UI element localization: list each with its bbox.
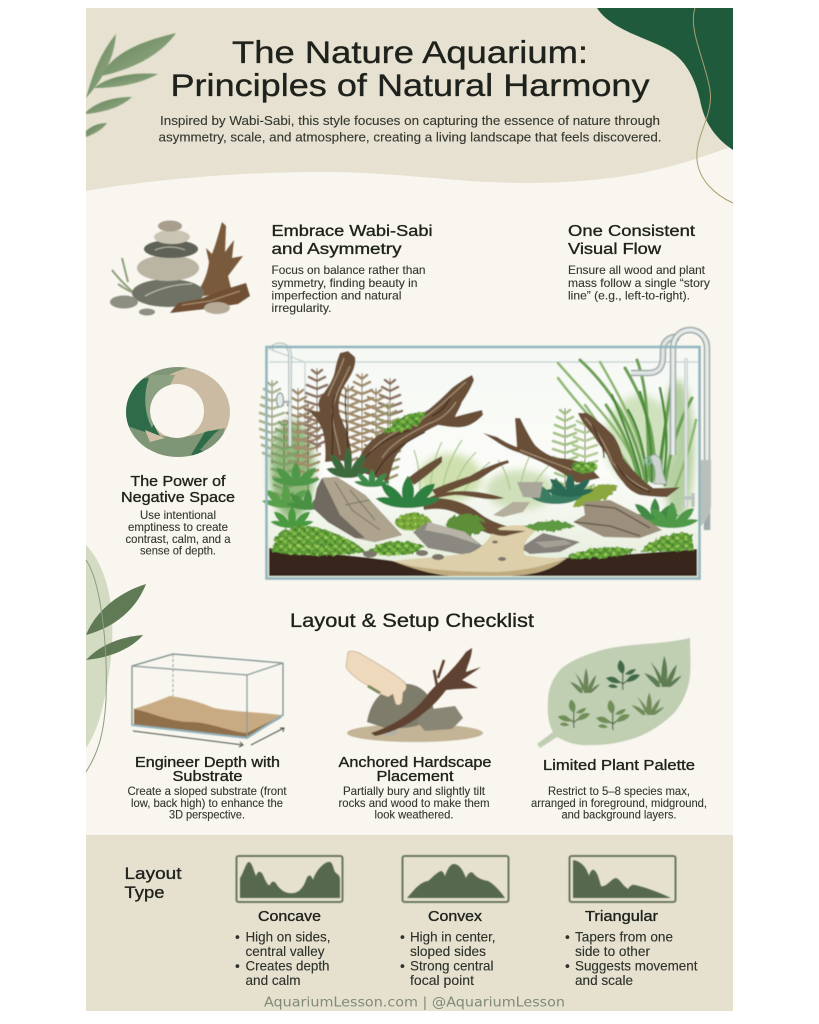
body text: irregularity. (272, 301, 332, 315)
title: The Nature Aquarium: (232, 34, 588, 70)
heading (338, 755, 492, 785)
icon: glass tank with sloped substrate (132, 654, 284, 747)
convex column (400, 856, 508, 988)
tall grass right (558, 360, 696, 488)
intro text (158, 113, 662, 144)
driftwood pieces (308, 351, 680, 536)
wood: lower branches (408, 456, 442, 485)
body text (126, 508, 231, 558)
title: Principles of Natural Harmony (170, 67, 650, 103)
heading (272, 223, 432, 258)
label: Triangular (585, 909, 658, 925)
body text: rocks and wood to make them (338, 796, 490, 810)
bullet list: focal point (410, 973, 474, 988)
body text (272, 263, 426, 315)
bullet list: Creates depth (246, 958, 330, 974)
bullet list: • (400, 930, 405, 944)
heading: Embrace Wabi-Sabi (272, 223, 432, 240)
heading: Negative Space (121, 489, 235, 506)
bullet list (565, 930, 698, 988)
lily cup (650, 455, 667, 484)
rock: stacked right (573, 500, 662, 538)
decoration: left side leaves (86, 545, 146, 772)
wood: large diagonal (355, 375, 483, 482)
heading (121, 473, 235, 506)
pipe: thin inlet (684, 358, 688, 508)
pale fern right (553, 408, 597, 496)
body text: arranged in foreground, midground, (531, 796, 707, 810)
bullet list: side to other (575, 944, 650, 959)
heading: layout type: Type (124, 883, 164, 902)
panel: substrate (128, 654, 287, 822)
icon: swirl ring (126, 367, 230, 457)
body text (568, 263, 710, 302)
bullet list: Strong central (410, 958, 494, 974)
bullet list: • (565, 930, 570, 944)
band background (86, 835, 733, 1011)
heading: One Consistent (568, 223, 696, 240)
fern behind big rock (326, 447, 370, 478)
bullet list: central valley (246, 944, 325, 959)
dark green corner blob (597, 8, 733, 150)
heading: Visual Flow (568, 241, 662, 258)
icon: concave silhouette (236, 856, 342, 902)
bullet list: Suggests movement (575, 958, 698, 974)
illustration: planted aquarium (260, 330, 711, 579)
heading: Substrate (172, 769, 242, 785)
right pipes (631, 330, 711, 530)
tank back lines (269, 349, 698, 435)
rocks (313, 477, 662, 555)
body text: mass follow a single “story (568, 276, 710, 290)
tank water (267, 347, 699, 579)
intro text: Inspired by Wabi-Sabi, this style focuses on capturing the essence of nature through (160, 113, 660, 128)
panel: consistent visual flow (568, 223, 710, 302)
body text: and background layers. (562, 808, 676, 822)
gold curved line (693, 8, 733, 203)
bullet list: • (400, 958, 405, 974)
heading: The Power of (130, 473, 226, 490)
background haze plants (270, 380, 694, 520)
bullet list: and calm (246, 973, 300, 988)
rock on sand (479, 520, 526, 536)
pipe: outflow elbow (631, 337, 680, 373)
body text: look weathered. (374, 808, 454, 822)
body text (128, 784, 287, 822)
poster background (86, 8, 733, 1011)
heading: Anchored Hardscape (338, 755, 492, 771)
intro text: asymmetry, scale, and atmosphere, creating a living landscape that feels discovered. (158, 130, 662, 144)
wood: upright trunk (308, 351, 355, 462)
bullet list: and scale (575, 973, 633, 988)
wood: right thick trunk (578, 413, 680, 497)
icon: triangular silhouette (570, 856, 676, 902)
panel: embrace wabi-sabi (110, 220, 432, 316)
icon: leaf branch top left (86, 33, 176, 137)
body text: Focus on balance rather than (272, 263, 426, 277)
body text: symmetry, finding beauty in (272, 276, 418, 290)
body text: Partially bury and slightly tilt (343, 784, 486, 798)
bullet list (235, 930, 330, 988)
body text: line” (e.g., left-to-right). (568, 288, 690, 302)
panel: layout types (86, 835, 733, 1011)
stem plants left (260, 368, 402, 504)
heading: Engineer Depth with (135, 755, 280, 771)
body text: emptiness to create (128, 520, 228, 534)
heading: Limited Plant Palette (543, 758, 695, 774)
body text (338, 784, 490, 822)
body text: 3D perspective. (169, 808, 245, 822)
left inflow pipe (271, 344, 290, 446)
panel: negative space (120, 360, 236, 558)
label: Convex (428, 909, 483, 925)
body text: imperfection and natural (272, 288, 402, 302)
tank frame (266, 347, 700, 578)
bullet list: Tapers from one (575, 930, 673, 944)
body text: Restrict to 5–8 species max, (548, 784, 690, 798)
concave column (235, 856, 342, 988)
heading (135, 755, 280, 785)
body text: sense of depth. (140, 544, 216, 558)
bullet list: sloped sides (410, 944, 486, 959)
substrate (269, 548, 697, 576)
bullet list: High on sides, (246, 930, 330, 944)
heading: and Asymmetry (272, 241, 402, 258)
mid plants (262, 462, 698, 528)
icon: hand placing rock and branch (346, 648, 483, 742)
icon: stone stack and driftwood (110, 220, 250, 316)
triangular column (565, 856, 698, 988)
bullet list: • (565, 958, 570, 974)
heading: Placement (376, 769, 454, 785)
body text: contrast, calm, and a (126, 532, 231, 546)
rock: rear (517, 482, 543, 498)
title (170, 34, 650, 103)
header wave background (86, 8, 733, 191)
rock: grey mid (413, 522, 485, 555)
rock: path right (520, 533, 580, 554)
body text: Create a sloped substrate (front (128, 784, 287, 798)
rock: large tilted (313, 477, 402, 542)
body text: low, back high) to enhance the (131, 796, 283, 810)
moss on wood (383, 412, 618, 536)
bullet list (400, 930, 496, 988)
sand path (393, 525, 567, 575)
bullet list: High in center, (410, 930, 496, 944)
foreground ground cover (272, 520, 693, 559)
pebbles (363, 540, 506, 561)
label: Concave (258, 909, 321, 925)
panel: hardscape (338, 648, 492, 822)
panel: plant palette (531, 638, 707, 822)
icon: convex silhouette (402, 856, 508, 902)
body text: Ensure all wood and plant (568, 263, 706, 277)
heading (568, 223, 696, 258)
footer credit: AquariumLesson.com | @AquariumLesson (264, 994, 565, 1010)
heading: layout and setup checklist: Layout & Setup Checklist (290, 611, 535, 632)
heading: layout type (124, 864, 182, 902)
bullet list: • (235, 958, 240, 974)
body text (531, 784, 707, 822)
icon: leaf with six plants (537, 638, 690, 748)
panel: header (86, 8, 733, 203)
bullet list: • (235, 930, 240, 944)
wood: right long branch (483, 418, 600, 483)
heading: layout type: Layout (124, 864, 182, 883)
body text: Use intentional (140, 508, 216, 522)
wood bark highlights (328, 358, 648, 490)
pale grass behind centre (414, 440, 552, 495)
pipe: main hook (673, 330, 707, 530)
